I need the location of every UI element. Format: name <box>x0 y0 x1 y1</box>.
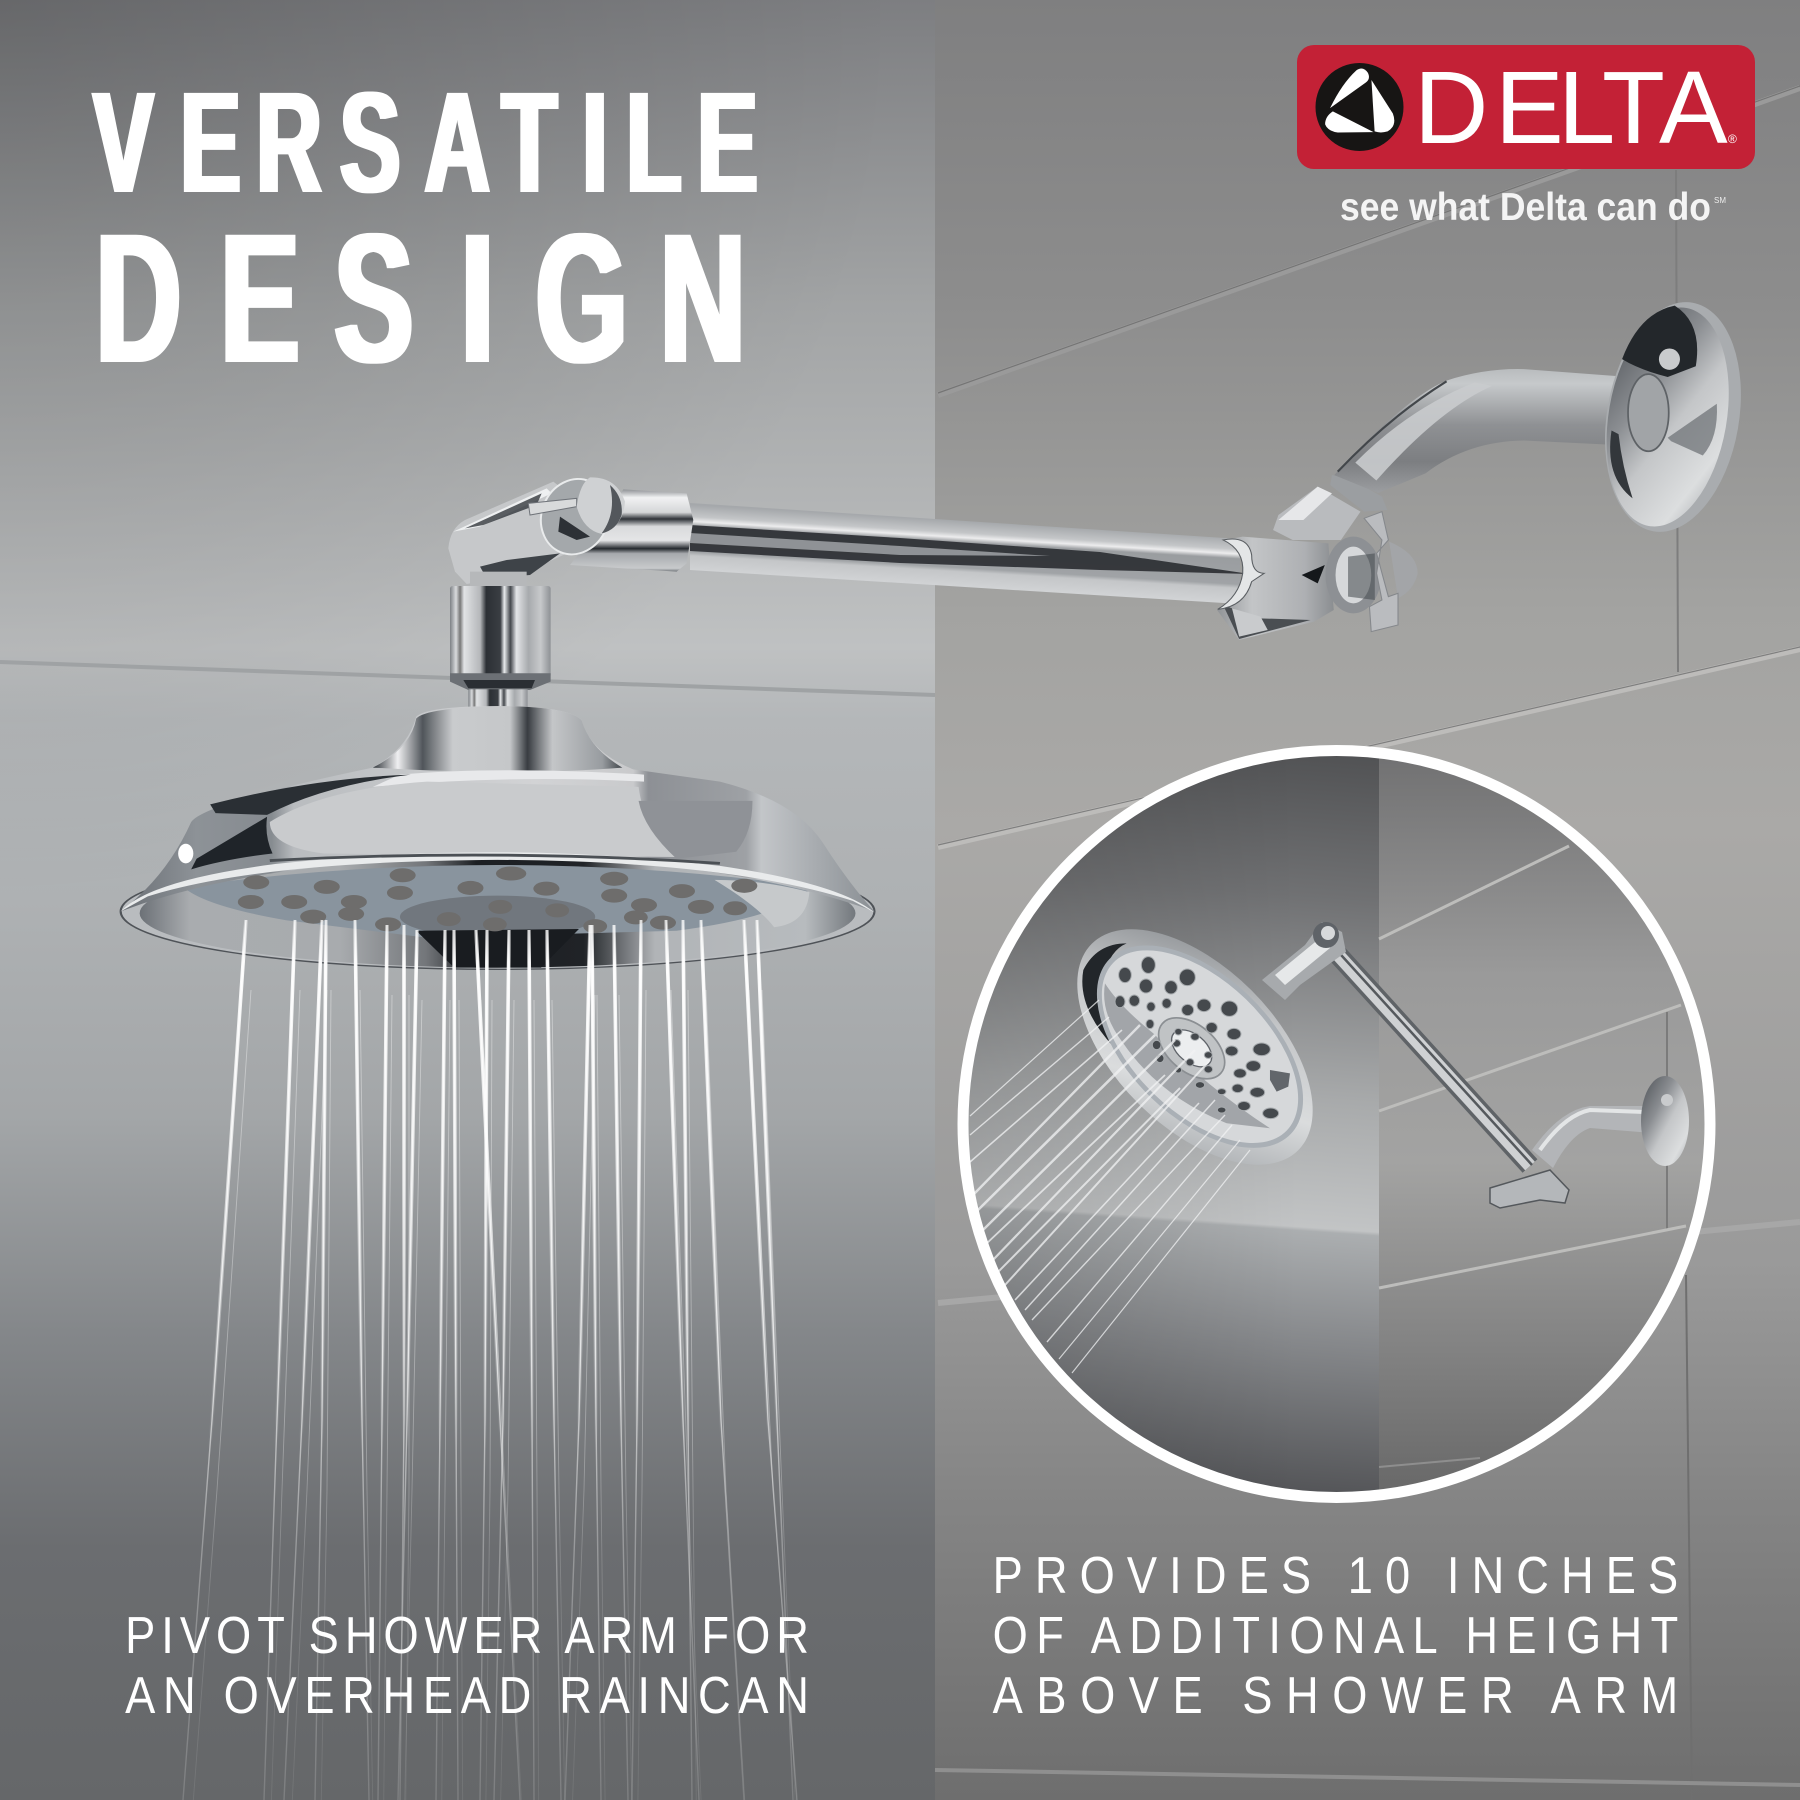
tagline: see what Delta can do <box>1340 186 1711 229</box>
nozzles <box>238 867 757 933</box>
logo wordmark: DELTA <box>1414 50 1728 165</box>
registered mark: ® <box>1728 132 1737 146</box>
inset curved arm <box>1532 1076 1689 1168</box>
inset ring <box>963 750 1710 1498</box>
curved wall arm <box>1334 369 1650 493</box>
left caption: PIVOT SHOWER ARM FOR <box>125 1607 809 1665</box>
title <box>93 62 758 401</box>
title line 1: VERSATILE <box>93 62 758 223</box>
arm bracket and adapter <box>1217 475 1418 640</box>
left caption <box>125 1607 809 1725</box>
tagline: SM <box>1714 196 1726 205</box>
background: right tiled wall <box>935 0 1800 1800</box>
inset background <box>969 756 1689 1492</box>
water streams <box>183 920 802 1800</box>
pivot elbow joint <box>448 469 693 584</box>
head dome and rim <box>121 706 874 969</box>
logo mark <box>1316 63 1404 151</box>
swivel collar <box>450 572 551 708</box>
background: left wall <box>0 0 935 1800</box>
right caption: ABOVE SHOWER ARM <box>993 1667 1678 1725</box>
inset circle <box>969 756 1689 1492</box>
wall escutcheon <box>1588 291 1758 543</box>
right caption: PROVIDES 10 INCHES <box>993 1547 1678 1605</box>
shower head assembly <box>121 469 874 969</box>
right caption <box>993 1547 1678 1725</box>
logo badge <box>1297 45 1755 169</box>
right caption: OF ADDITIONAL HEIGHT <box>993 1607 1678 1665</box>
title line 2: DESIGN <box>96 194 746 401</box>
inset shower head <box>1077 929 1313 1164</box>
shower arm tube <box>690 503 1250 604</box>
left caption: AN OVERHEAD RAINCAN <box>125 1667 809 1725</box>
inset water spray <box>970 1000 1250 1373</box>
head underside <box>121 854 874 969</box>
rim bright band <box>121 852 874 912</box>
inset arm <box>1262 922 1569 1208</box>
